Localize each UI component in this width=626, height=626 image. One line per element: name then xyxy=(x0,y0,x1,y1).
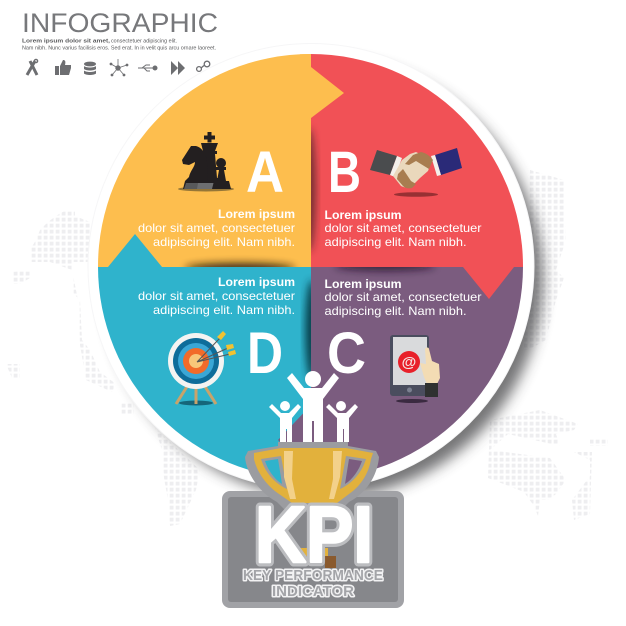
figure: left person xyxy=(269,401,301,442)
quadrant shadow: purple top xyxy=(335,261,435,271)
arrow: purple into teal xyxy=(278,414,303,442)
icon: tablet with at sign: @ xyxy=(402,354,416,371)
icon: tablet with at sign xyxy=(390,335,440,403)
panel text: C: Lorem ipsum xyxy=(324,277,402,291)
white ring around circle xyxy=(88,44,534,490)
panel text: D: Lorem ipsum xyxy=(218,275,295,289)
icon: thumb up xyxy=(55,60,71,75)
KPI letters: KPI xyxy=(255,490,373,579)
panel text: A xyxy=(138,207,295,249)
KPI letters outline: KPI xyxy=(255,490,373,579)
badge panel xyxy=(222,491,404,608)
arrow: red into purple xyxy=(463,267,514,299)
letter A: A xyxy=(246,140,284,205)
circle panels xyxy=(98,54,524,480)
icon: database xyxy=(84,62,96,75)
KPI badge xyxy=(222,442,404,608)
INDICATOR label: INDICATOR xyxy=(272,583,354,600)
panel text: A: Lorem ipsum xyxy=(218,207,295,221)
panel text: D: adipiscing elit. Nam nibh. xyxy=(153,303,295,317)
icon row xyxy=(27,59,210,76)
people group xyxy=(269,371,358,442)
panel: A yellow quadrant xyxy=(98,54,311,267)
icon: usb xyxy=(138,65,157,71)
panel: D teal quadrant xyxy=(98,267,311,480)
arrow: yellow into red xyxy=(300,54,344,120)
icon: handshake xyxy=(370,148,462,197)
icon: tools xyxy=(27,59,38,75)
subheading text xyxy=(22,38,216,52)
panel text: C: adipiscing elit. Nam nibh. xyxy=(324,304,466,318)
heading: INFOGRAPHIC: INFOGRAPHIC xyxy=(22,8,218,38)
panel text: B: dolor sit amet, consectetuer xyxy=(324,221,482,235)
KEY PERFORMANCE label: KEY PERFORMANCE xyxy=(243,567,383,584)
panel text: C: dolor sit amet, consectetuer xyxy=(324,290,482,304)
icon: network xyxy=(110,59,128,76)
panel text: C xyxy=(324,277,482,318)
panel text: B: Lorem ipsum xyxy=(324,208,402,222)
icon: archery target xyxy=(168,331,236,406)
circle drop shadow xyxy=(105,60,543,498)
panel text: B xyxy=(324,208,482,249)
subheading text: consectetuer adipiscing elit. xyxy=(111,38,177,44)
subheading text: Lorem ipsum dolor sit amet, xyxy=(22,38,111,44)
icon: share link xyxy=(197,61,210,71)
trophy xyxy=(245,442,379,568)
letter C: C xyxy=(327,321,366,386)
quadrant shadow: yellow bottom xyxy=(185,263,295,273)
letter B: B xyxy=(328,140,361,205)
icon: chess pieces xyxy=(178,132,234,192)
panel text: A: adipiscing elit. Nam nibh. xyxy=(153,235,295,249)
panel text: D xyxy=(138,275,295,317)
icon: fast forward xyxy=(171,61,185,75)
panel: C purple quadrant xyxy=(311,267,524,480)
arrow: teal into yellow xyxy=(108,234,162,267)
subheading text: Nam nibh. Nunc varius facilisis eros. Sed erat. In in velit quis arcu ornare laoreet. xyxy=(22,46,216,52)
quadrant shadow: teal side xyxy=(300,276,311,380)
dotted world map background xyxy=(6,170,608,526)
panel text: B: adipiscing elit. Nam nibh. xyxy=(324,235,466,249)
figure: centre person xyxy=(287,371,339,442)
panel text: A: dolor sit amet, consectetuer xyxy=(138,221,295,235)
letter D: D xyxy=(247,321,283,386)
panel: B red quadrant xyxy=(311,54,524,267)
quadrant shadow: red side xyxy=(311,125,320,255)
figure: right person xyxy=(326,401,358,442)
panel text: D: dolor sit amet, consectetuer xyxy=(138,289,295,303)
